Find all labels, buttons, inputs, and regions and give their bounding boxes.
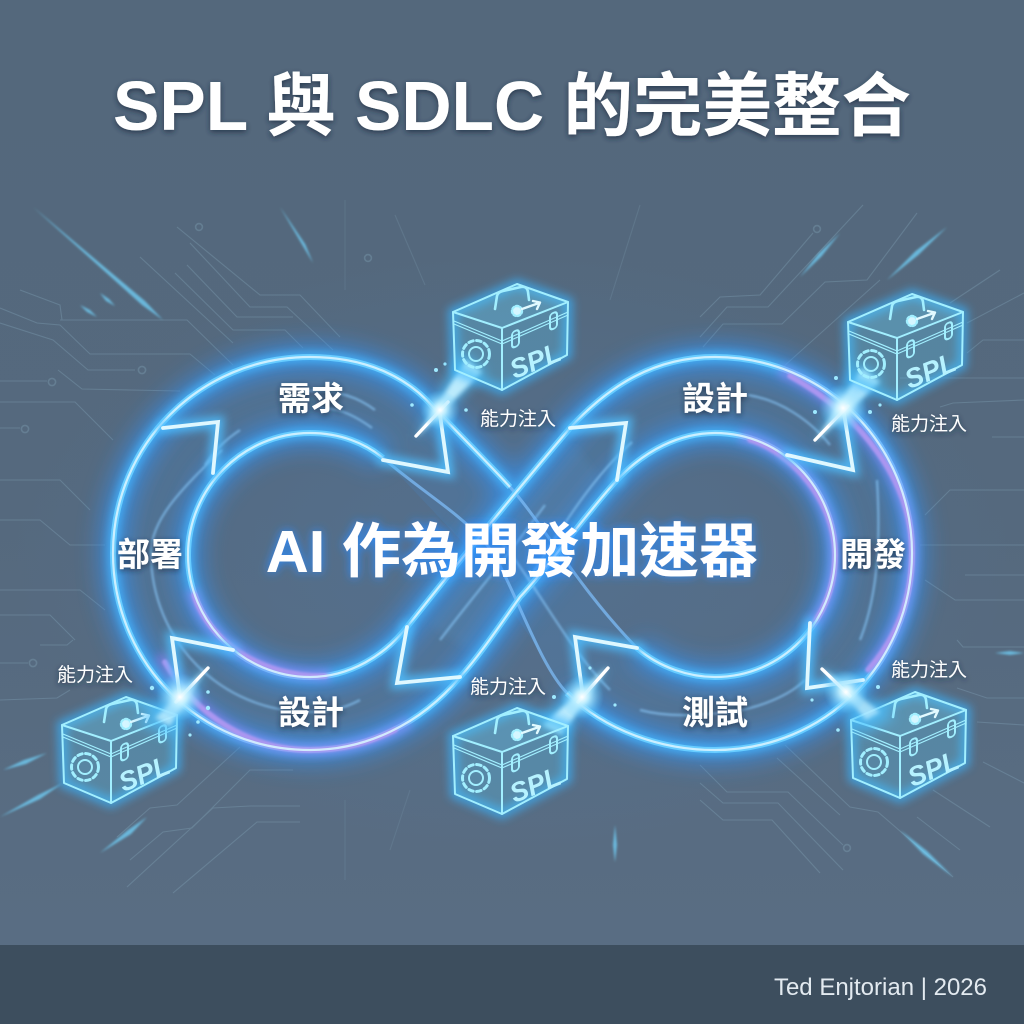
loop middle glow: [113, 357, 912, 750]
centre heading: AI 作為開發加速器: [266, 518, 758, 585]
loop outer glow: [113, 357, 912, 750]
label: injection bottom centre: 能力注入: [470, 676, 546, 698]
rising band highlight: [430, 445, 600, 650]
infinity loop: [113, 357, 912, 750]
beam: bottom left: [135, 666, 210, 738]
toolbox: bottom left: SPL: [114, 750, 174, 798]
toolbox: top right: [848, 294, 963, 400]
label: injection bottom right: 能力注入: [891, 659, 967, 681]
glow behind infinity loop: [12, 255, 1012, 855]
inner band contour lines: [151, 391, 878, 715]
footer credit: Ted Enjtorian | 2026: [774, 974, 987, 1001]
toolbox: top centre: [453, 284, 568, 390]
footer bar: [0, 945, 1024, 1024]
label: design right: 設計: [682, 380, 748, 417]
label: design left: 設計: [278, 694, 344, 731]
purple sections glow: [160, 370, 912, 750]
beam: top centre: [410, 352, 486, 438]
injection beams over boxes: [135, 666, 896, 738]
stage labels: [117, 380, 906, 731]
label: requirements: 需求: [278, 380, 344, 417]
label: deploy: 部署: [117, 536, 183, 573]
toolbox: top right: SPL: [900, 347, 960, 395]
loop bright core: [113, 357, 912, 750]
purple sections: [165, 376, 912, 750]
label: develop: 開發: [840, 536, 906, 573]
title: SPL 與 SDLC 的完美整合: [113, 67, 911, 145]
toolbox: bottom centre: [453, 708, 568, 814]
injection beams behind boxes: [410, 352, 884, 735]
beam: bottom centre: [535, 666, 617, 735]
band tint: [113, 357, 912, 750]
toolbox: top centre: SPL: [505, 337, 565, 385]
beam: bottom right: [810, 666, 896, 736]
toolbox: bottom centre: SPL: [505, 761, 565, 809]
beam: top right: [813, 362, 884, 442]
loop coloured stroke: [113, 357, 912, 750]
chevron arrowheads: [163, 407, 863, 697]
circuit traces: [0, 200, 1024, 893]
label: test: 測試: [682, 694, 748, 731]
label: injection top right: 能力注入: [891, 413, 967, 435]
light streaks: [0, 207, 1024, 877]
label: injection bottom left: 能力注入: [57, 664, 133, 686]
toolbox: bottom right: [851, 692, 966, 798]
toolbox: bottom left: [62, 697, 177, 803]
toolbox: bottom right: SPL: [903, 745, 963, 793]
label: injection top centre: 能力注入: [480, 408, 556, 430]
faded descending edges under the crossing: [383, 458, 637, 693]
capability injection labels: [57, 408, 967, 698]
